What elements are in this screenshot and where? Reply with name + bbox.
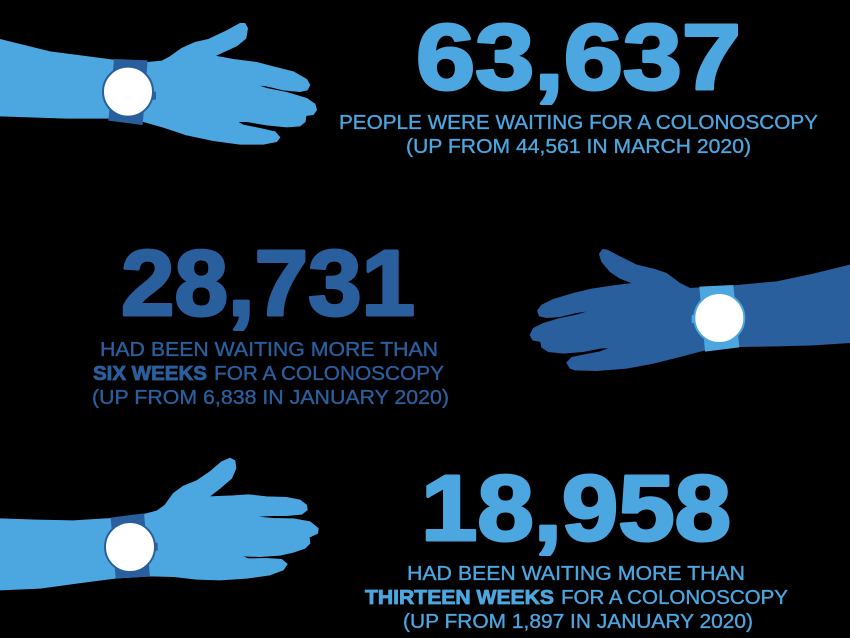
text: people waiting — [339, 112, 818, 158]
text: six weeks — [92, 339, 449, 409]
text: thirteen weeks: HAD BEEN WAITING MORE THAN — [407, 563, 745, 585]
text: six weeks: (UP FROM 6,838 IN JANUARY 2020) — [92, 387, 449, 409]
text: thirteen weeks: FOR A COLONOSCOPY — [561, 587, 788, 609]
heading: 63,637: 63,637 — [416, 5, 741, 109]
icon: hand with watch, middle — [530, 249, 850, 371]
text: six weeks: FOR A COLONOSCOPY — [214, 363, 444, 385]
icon: hand with watch, bottom — [0, 458, 318, 590]
text: thirteen weeks: (UP FROM 1,897 IN JANUARY 2020) — [403, 611, 753, 633]
heading: 18,958: 18,958 — [421, 456, 731, 560]
text: people waiting: (UP FROM 44,561 IN MARCH 2020) — [406, 136, 751, 158]
text: people waiting: PEOPLE WERE WAITING FOR A COLONOSCOPY — [339, 112, 818, 134]
text: six weeks: HAD BEEN WAITING MORE THAN — [100, 339, 438, 361]
heading: 28,731: 28,731 — [121, 231, 415, 335]
text: thirteen weeks — [365, 563, 788, 633]
text: six weeks: SIX WEEKS — [93, 363, 207, 385]
text: thirteen weeks: THIRTEEN WEEKS — [365, 587, 554, 609]
icon: hand with watch, top — [0, 23, 317, 144]
